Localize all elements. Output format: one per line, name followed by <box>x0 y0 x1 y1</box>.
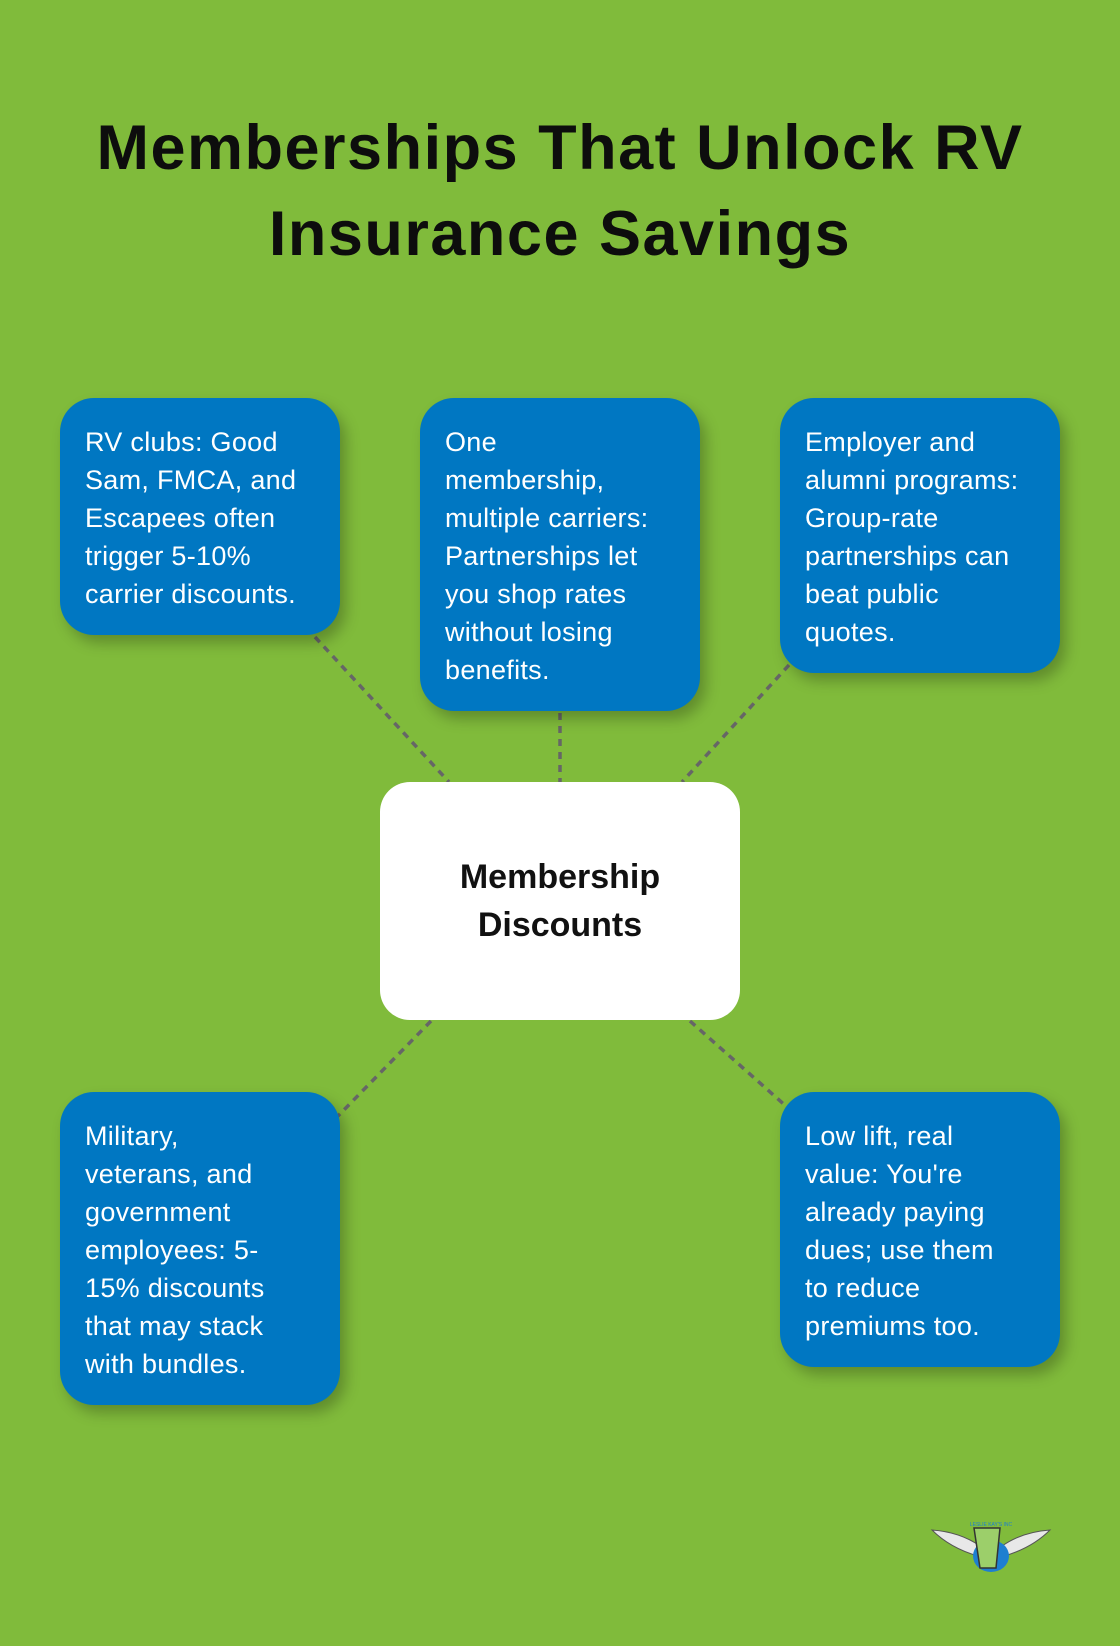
logo: LESLIE KAY'S INC <box>970 1522 1013 1528</box>
panel: low lift: to reduce <box>805 1273 920 1303</box>
panel: one membership: One <box>445 427 497 457</box>
panel: military <box>60 1092 340 1405</box>
panel: military: employees: 5- <box>85 1235 258 1265</box>
panel: RV clubs: Sam, FMCA, and <box>85 465 296 495</box>
title: Insurance Savings <box>269 199 851 269</box>
panel: one membership: you shop rates <box>445 579 626 609</box>
logo <box>930 1522 1052 1572</box>
panel: employer and alumni: Group-rate <box>805 503 939 533</box>
panel: military: with bundles. <box>85 1349 246 1379</box>
panel: employer and alumni: partnerships can <box>805 541 1009 571</box>
panel: military: veterans, and <box>85 1159 253 1189</box>
panel: low lift: premiums too. <box>805 1311 980 1341</box>
panel: RV clubs: carrier discounts. <box>85 579 296 609</box>
panel: one membership: without losing <box>445 617 613 647</box>
panel: employer and alumni: quotes. <box>805 617 896 647</box>
panel: military: government <box>85 1197 231 1227</box>
panel: low lift: dues; use them <box>805 1235 994 1265</box>
panel: low lift <box>780 1092 1060 1367</box>
center: membership discounts: Discounts <box>478 906 642 944</box>
title: Memberships That Unlock RV <box>96 113 1024 183</box>
panel: one membership: benefits. <box>445 655 550 685</box>
panel: RV clubs: RV clubs: Good <box>85 427 278 457</box>
panel: one membership: Partnerships let <box>445 541 637 571</box>
panel: low lift: Low lift, real <box>805 1121 953 1151</box>
panel: one membership: membership, <box>445 465 604 495</box>
panel: employer and alumni: Employer and <box>805 427 975 457</box>
panel: military: Military, <box>85 1121 179 1151</box>
panel: RV clubs <box>60 398 340 635</box>
panel: military: that may stack <box>85 1311 263 1341</box>
panel: employer and alumni <box>780 398 1060 673</box>
panel: military: 15% discounts <box>85 1273 265 1303</box>
panel: RV clubs: trigger 5-10% <box>85 541 251 571</box>
panel: employer and alumni: beat public <box>805 579 939 609</box>
panel: employer and alumni: alumni programs: <box>805 465 1018 495</box>
title <box>96 113 1024 269</box>
center: membership discounts <box>380 782 740 1020</box>
center: membership discounts: Membership <box>460 858 660 896</box>
panel: one membership: multiple carriers: <box>445 503 648 533</box>
panel: RV clubs: Escapees often <box>85 503 275 533</box>
panel: low lift: value: You're <box>805 1159 963 1189</box>
panel: low lift: already paying <box>805 1197 985 1227</box>
panel: one membership <box>420 398 700 711</box>
